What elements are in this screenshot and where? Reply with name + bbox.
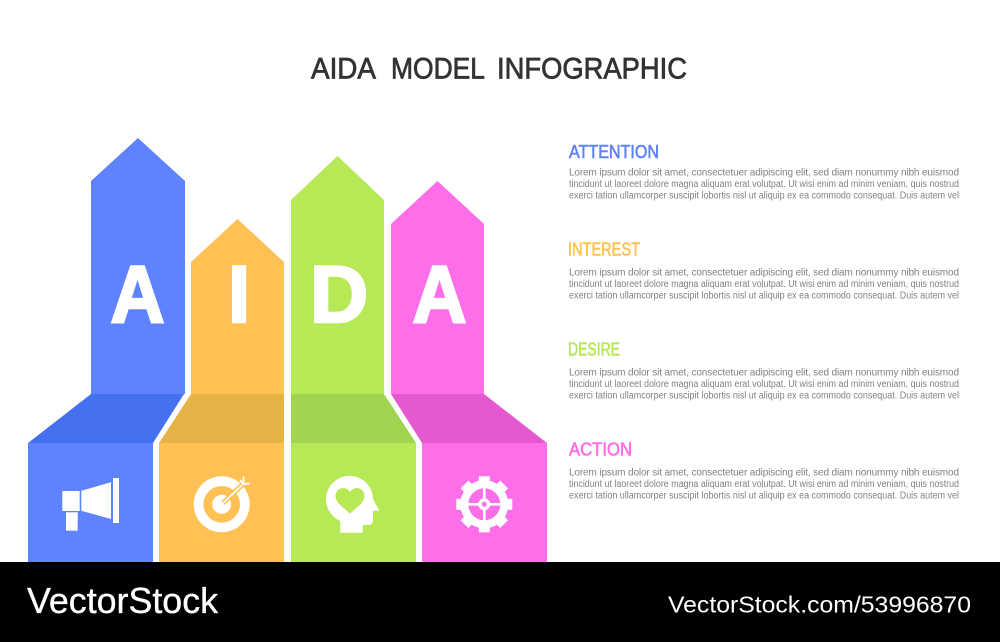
base panel: desire: [291, 443, 416, 562]
body: desire: tincidunt ut laoreet dolore magna aliquam erat volutpat. Ut wisi enim ad minim veniam, quis nostrud: [569, 379, 959, 390]
base panel: attention: [28, 443, 153, 562]
icon: megaphone: [62, 478, 119, 531]
text block: action: [569, 440, 959, 502]
base panel: interest: [159, 443, 284, 562]
body: attention: [569, 168, 959, 202]
column: I interest: [159, 219, 284, 562]
heading: action: ACTION: [569, 440, 632, 460]
column: A action: [391, 181, 547, 562]
text block: desire: [568, 340, 959, 402]
body: interest: Lorem ipsum dolor sit amet, consectetuer adipiscing elit, sed diam nonummy nibh euismod: [569, 268, 959, 279]
body: attention: tincidunt ut laoreet dolore magna aliquam erat volutpat. Ut wisi enim ad minim veniam, quis nostrud: [569, 179, 959, 190]
footer url: VectorStock.com/53996870: [668, 592, 971, 618]
column: A attention: [28, 138, 185, 562]
arrow: desire: [291, 156, 384, 394]
footer logo text: VectorStock: [27, 580, 219, 621]
heading: desire: DESIRE: [568, 340, 620, 360]
base panel: action: [422, 443, 547, 562]
letter A: A: [412, 250, 466, 340]
body: desire: [569, 368, 959, 402]
body: interest: [569, 268, 959, 302]
title: AIDA: [311, 52, 376, 86]
fold: desire: [291, 394, 416, 443]
arrow: action: [391, 181, 484, 394]
letter A: A: [110, 250, 164, 340]
column: D desire: [291, 156, 416, 562]
icon: gear: [456, 476, 512, 532]
title: [311, 52, 687, 86]
letter I: I: [228, 250, 250, 340]
icon: target with dart: [194, 476, 250, 532]
fold: interest: [159, 394, 284, 443]
title: MODEL: [391, 52, 485, 86]
body: interest: exerci tation ullamcorper suscipit lobortis nisl ut aliquip ex ea commodo consequat. Duis autem vel: [569, 290, 959, 302]
arrow: interest: [191, 219, 284, 394]
fold: action: [391, 394, 547, 443]
text block: attention: [569, 142, 959, 202]
title: INFOGRAPHIC: [497, 52, 687, 86]
letter D: D: [310, 250, 368, 340]
icon: head with heart: [326, 476, 379, 533]
body: action: [569, 468, 959, 502]
body: action: tincidunt ut laoreet dolore magna aliquam erat volutpat. Ut wisi enim ad minim veniam, quis nostrud: [569, 479, 959, 490]
text block: interest: [568, 240, 959, 302]
heading: interest: INTEREST: [568, 240, 640, 260]
body: desire: Lorem ipsum dolor sit amet, consectetuer adipiscing elit, sed diam nonummy nibh euismod: [569, 368, 959, 379]
heading: attention: ATTENTION: [569, 142, 659, 162]
footer bar: [0, 562, 1000, 642]
arrow: attention: [91, 138, 185, 394]
body: action: exerci tation ullamcorper suscipit lobortis nisl ut aliquip ex ea commodo consequat. Duis autem vel: [569, 490, 959, 502]
fold: attention: [28, 394, 184, 443]
body: desire: exerci tation ullamcorper suscipit lobortis nisl ut aliquip ex ea commodo consequat. Duis autem vel: [569, 390, 959, 402]
body: interest: tincidunt ut laoreet dolore magna aliquam erat volutpat. Ut wisi enim ad minim veniam, quis nostrud: [569, 279, 959, 290]
body: attention: Lorem ipsum dolor sit amet, consectetuer adipiscing elit, sed diam nonummy nibh euismod: [569, 168, 959, 179]
body: attention: exerci tation ullamcorper suscipit lobortis nisl ut aliquip ex ea commodo consequat. Duis autem vel: [569, 190, 959, 202]
body: action: Lorem ipsum dolor sit amet, consectetuer adipiscing elit, sed diam nonummy nibh euismod: [569, 468, 959, 479]
